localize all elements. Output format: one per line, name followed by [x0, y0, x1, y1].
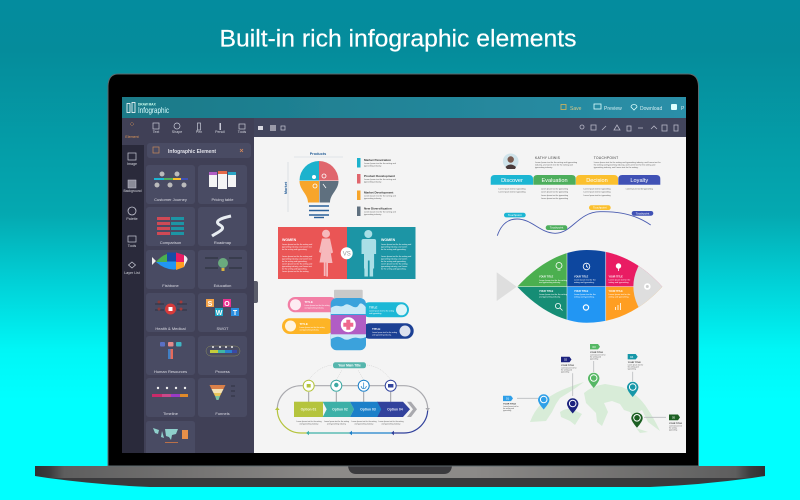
fish text: YOUR TITLE: [608, 290, 623, 293]
card: fishbone: [146, 250, 195, 289]
pill: cyan: and typesetting.: [369, 312, 382, 315]
app header bar: DRAW MAX: [138, 102, 157, 106]
fish text: writing and typesetting.: [574, 296, 595, 298]
women text: typesetting industry, and Lorem text: [282, 265, 312, 268]
pin 03: YOUR TITLE: [590, 352, 604, 354]
card: swot: T: [233, 310, 238, 317]
persona text: typesetting industry.: [535, 166, 553, 169]
pin 01: 01: [506, 397, 509, 401]
app header bar: Preview: [604, 106, 622, 112]
card: roadmap: [198, 207, 247, 246]
stage captions: Lorem Ipsum text for typesetting: [541, 188, 568, 190]
card: comparison: [146, 207, 195, 246]
panel header: Infographic Element: [168, 149, 216, 155]
card: fishbone: Fishbone: [162, 283, 179, 288]
pill: cyan: TITLE: [369, 306, 377, 310]
pill: blue: and typesetting industry.: [372, 333, 392, 336]
stage tabs: Decision: [586, 178, 608, 184]
men text: typesetting industry, and Lorem: [381, 246, 408, 248]
persona text: typesetting industry, and Lorem text for the writing.: [594, 166, 639, 169]
touchpoint tags: Touchpoint: [508, 213, 522, 217]
stage tabs: [491, 175, 660, 185]
card: customer journey: Customer Journey: [154, 197, 187, 202]
legend: typesetting industry.: [364, 180, 382, 184]
women text: for the writing and typesetting.: [282, 268, 308, 270]
legend: typesetting industry.: [364, 197, 382, 200]
pill: cyan: [362, 302, 409, 317]
stage captions: Lorem Ipsum text for typesetting: [541, 190, 568, 194]
women text: [282, 238, 312, 273]
pill: yellow: Lorem Ipsum text for the writing: [300, 326, 325, 329]
bottle: [331, 290, 366, 350]
app header bar: P: [681, 106, 685, 112]
pill: blue: TITLE: [372, 327, 380, 331]
persona text: Lorem Ipsum text for the writing and typesetting: [535, 161, 577, 164]
toolbar: Shape: [172, 130, 182, 134]
app header bar: Save: [570, 106, 582, 112]
fish text: and typesetting industry.: [539, 281, 561, 284]
stage captions: [498, 188, 653, 200]
pill: pink: and typesetting industry.: [304, 306, 324, 309]
pin 02: YOUR TITLE: [561, 365, 575, 367]
men text: Lorem Ipsum text for the writing: [381, 262, 407, 266]
stage captions: Lorem Ipsum text for typesetting: [541, 194, 568, 197]
step circles: [303, 380, 396, 391]
icon rail: Layer List: [124, 271, 140, 275]
pin 02: [561, 357, 578, 414]
fish text: writing and typesetting.: [608, 281, 629, 284]
toolbar: Element: [125, 135, 139, 139]
fish icons: [555, 262, 621, 310]
card: funnels: Funnels: [215, 411, 230, 416]
process flow infographic: [275, 362, 430, 435]
card: timeline: Timeline: [163, 411, 179, 416]
legend: Market Penetration: [364, 158, 391, 162]
fish text: YOUR TITLE: [539, 290, 554, 293]
pin 02: Lorem Ipsum text for: [561, 366, 577, 370]
persona text: TOUCHPOINT: [594, 156, 618, 160]
pill: yellow: [282, 318, 334, 334]
pin 02: typesetting: [561, 370, 569, 374]
card: swot: SWOT: [216, 326, 229, 331]
step connectors: [309, 392, 391, 402]
legend: [357, 158, 396, 216]
persona text: the writing and typesetting industry, and Lorem text for the writing and: [594, 163, 655, 166]
icon rail: Tools: [128, 244, 136, 248]
men text: WOMEN: [381, 238, 396, 242]
bulb infographic: [284, 152, 396, 218]
panel header: [147, 143, 251, 158]
map infographic: [503, 344, 683, 433]
men text: for the writing and typesetting.: [381, 248, 407, 251]
pill: cyan: Lorem Ipsum text for the writing: [369, 310, 394, 312]
fish infographic: [496, 250, 662, 323]
card: process: [198, 336, 247, 375]
card: swot: W: [216, 310, 223, 317]
persona text: Lorem Ipsum text for the writing and typesetting industry, and Lorem text for: [594, 161, 661, 164]
app header bar: Download: [640, 106, 662, 112]
legend: Market Development: [364, 190, 393, 194]
stage captions: Lorem Ipsum text for typesetting: [626, 188, 653, 190]
touchpoint tags: Touchpoint: [550, 226, 563, 230]
option arrow: Option 01: [301, 408, 316, 412]
men text: [381, 238, 411, 270]
fish text: Lorem Ipsum text for the writing: [539, 293, 567, 296]
fish text: Lorem Ipsum text for the: [608, 278, 631, 282]
pin 01: the writing and: [503, 407, 514, 410]
panel collapse handle: [254, 281, 258, 303]
men text: for the writing and typesetting.: [381, 268, 407, 270]
legend: Product Development: [364, 174, 395, 178]
women text: typesetting industry, and Lorem text: [282, 246, 312, 248]
main title pill: [333, 362, 366, 368]
women text: Lorem Ipsum text for the writing.: [282, 270, 309, 273]
toolbar: Pencil: [215, 130, 225, 134]
men text: typesetting industry, and Lorem: [381, 265, 408, 268]
card: world map: [146, 421, 195, 453]
sidebar panel: [144, 137, 254, 453]
icon rail: Image: [127, 162, 137, 166]
vs badge: VS: [343, 252, 351, 258]
option captions: and typesetting industry.: [354, 422, 374, 426]
man figure: [362, 230, 376, 276]
avatar: [503, 154, 518, 169]
touchpoint curve: [497, 212, 651, 236]
app header bar: Infographic: [138, 105, 170, 115]
pill: pink: Lorem Ipsum text for the writing: [304, 304, 330, 307]
card: swot: [198, 293, 247, 332]
fish text: Lorem Ipsum text for the: [574, 293, 597, 296]
pin 05: Lorem Ipsum text: [669, 424, 683, 428]
women text: typesetting industry, and Lorem text: [282, 258, 312, 260]
pin 04: the writing and: [628, 366, 639, 368]
icon rail: [122, 145, 144, 453]
app window: [122, 97, 686, 453]
men text: typesetting industry, and Lorem: [381, 258, 408, 260]
pin 05: the writing: [669, 426, 677, 430]
pin 05: 05: [672, 416, 675, 420]
customer journey infographic: [491, 154, 661, 236]
fish text: YOUR TITLE: [608, 276, 623, 278]
women text: for the writing and typesetting.: [282, 248, 308, 251]
card: comparison: Comparison: [160, 240, 181, 245]
stage captions: Lorem Ipsum text for typesetting: [498, 190, 526, 194]
world map: [530, 382, 660, 433]
pill: blue: [362, 323, 414, 339]
fish tail: [497, 272, 517, 301]
pin 05: YOUR TITLE: [669, 423, 683, 425]
option arrow: Option 03: [360, 408, 376, 412]
stage captions: Lorem Ipsum text for typesetting: [498, 188, 526, 190]
toolbar: ⁘: [129, 120, 135, 129]
pill: yellow: TITLE: [300, 322, 308, 326]
card: pricing table: [198, 165, 247, 204]
option arrow: Option 02: [332, 408, 348, 412]
pin 05: [631, 413, 683, 432]
toolbar: Pen: [196, 130, 202, 134]
fish text: Lorem Ipsum text for the: [608, 293, 631, 296]
pin 04: [627, 354, 644, 397]
pin 04: YOUR TITLE: [628, 362, 641, 364]
icon rail: Background: [123, 189, 142, 193]
legend: Lorem Ipsum text for the writing and: [364, 178, 396, 181]
fish text: YOUR TITLE: [574, 276, 589, 278]
main title pill: Your Main Title: [338, 364, 361, 368]
fish text: YOUR TITLE: [574, 290, 589, 293]
card: education: Education: [214, 283, 231, 288]
axis labels: Products: [310, 152, 326, 156]
card: human resources: Human Resources: [154, 369, 187, 374]
pin 01: Lorem Ipsum text for: [503, 405, 519, 408]
stage captions: Lorem Ipsum text for typesetting: [541, 197, 568, 200]
persona text: KATHY LEWIS: [535, 156, 561, 160]
toolbar: [122, 118, 686, 145]
card: swot: S: [208, 301, 213, 308]
persona text: industry, and Lorem text for the writing and: [535, 163, 573, 166]
men text: Lorem Ipsum text for the writing and: [381, 255, 411, 258]
axis labels: Market: [284, 181, 288, 194]
women text: Lorem Ipsum text for the writing and: [282, 255, 312, 258]
legend: Lorem Ipsum text for the writing and: [364, 162, 396, 165]
card: human resources: [146, 336, 195, 375]
touchpoint tags: Touchpoint: [636, 211, 649, 215]
app header bar: [122, 97, 686, 118]
option captions: Lorem Ipsum text for the writing: [324, 420, 349, 423]
card: process: Process: [215, 369, 230, 374]
option captions: and typesetting industry.: [327, 422, 347, 426]
touchpoint tags: [504, 205, 653, 230]
card: health and medical: Health & Medical: [155, 326, 186, 331]
pin 03: Lorem Ipsum text for: [590, 354, 606, 356]
fish text: Lorem Ipsum text for the: [574, 278, 597, 282]
women text: Lorem Ipsum text for the writing and: [282, 243, 312, 246]
toolbar: Text: [153, 130, 159, 134]
canvas: [254, 137, 686, 453]
option captions: Lorem Ipsum text for the writing: [296, 420, 322, 423]
pin 03: typesetting: [590, 358, 598, 360]
card: customer journey: [146, 165, 195, 204]
fish text: [539, 276, 631, 298]
touchpoint tags: Touchpoint: [593, 206, 607, 210]
pin 05: typesetting: [669, 428, 677, 432]
legend: Lorem Ipsum text for the writing and: [364, 210, 396, 214]
pin 01: [503, 394, 549, 412]
pill: pink: [288, 297, 338, 312]
pin 01: typesetting: [503, 409, 511, 412]
pin 02: the writing and: [561, 368, 572, 372]
card: funnels: [198, 378, 247, 417]
fish eye: [644, 283, 651, 290]
option captions: Lorem Ipsum text for the writing: [351, 420, 377, 423]
connector lines: [517, 361, 666, 417]
option captions: and typesetting industry.: [381, 422, 401, 426]
legend: typesetting industry.: [364, 164, 382, 168]
card: education: [198, 250, 247, 289]
laptop base: [35, 466, 765, 487]
pin 03: [588, 344, 606, 388]
option captions: [296, 420, 404, 426]
option arrow: [294, 402, 417, 417]
toolbar: Tools: [238, 130, 246, 134]
women text: WOMEN: [282, 238, 297, 242]
option captions: Lorem Ipsum text for the writing: [378, 420, 404, 423]
axis labels: [284, 152, 343, 212]
pill: pink: TITLE: [304, 300, 313, 304]
card: health and medical: [146, 293, 195, 332]
icon rail: Palette: [126, 217, 138, 221]
men text: Lorem Ipsum text for the writing and: [381, 243, 411, 246]
pill: yellow: and typesetting industry.: [300, 328, 319, 331]
stage tabs: Discover: [501, 178, 523, 184]
stage captions: Lorem Ipsum text for typesetting: [583, 188, 611, 190]
fish text: YOUR TITLE: [539, 276, 554, 278]
pin 04: typesetting: [628, 368, 636, 370]
option captions: and typesetting industry.: [299, 422, 319, 426]
women text: for the writing and typesetting.: [282, 260, 308, 263]
medicine bottle infographic: [282, 290, 414, 350]
laptop screen bezel: [108, 74, 698, 466]
card: timeline: [146, 378, 195, 417]
pill: blue: Lorem Ipsum text for the writing: [372, 331, 397, 334]
pin 04: Lorem Ipsum text for: [628, 364, 644, 366]
pin 02: 02: [564, 358, 567, 362]
stage tabs: Loyalty: [630, 178, 648, 184]
legend: Lorem Ipsum text for the writing and: [364, 194, 396, 198]
card: roadmap: Roadmap: [214, 240, 232, 245]
stage tabs: Evaluation: [541, 178, 568, 184]
pin 03: 03: [592, 345, 596, 349]
pin 04: 04: [630, 355, 634, 359]
option arrow: Option 04: [387, 408, 403, 412]
legend: New Diversification: [364, 206, 392, 210]
persona text: [535, 156, 661, 169]
fish text: writing and typesetting.: [608, 296, 629, 298]
fish text: and typesetting industry.: [539, 296, 561, 298]
stage captions: Lorem Ipsum text for typesetting: [583, 190, 611, 194]
card: pricing table: Pricing table: [211, 197, 234, 202]
fish text: Lorem Ipsum text for the writing: [539, 279, 567, 282]
women text: Lorem Ipsum text for the writing and: [282, 262, 312, 266]
pin 01: YOUR TITLE: [503, 404, 517, 406]
woman figure: [319, 230, 333, 276]
track oval: [275, 386, 430, 435]
women versus men panel: [278, 227, 416, 279]
card: swot: O: [224, 301, 230, 308]
legend: typesetting industry.: [364, 213, 382, 216]
stage captions: Lorem Ipsum text for typesetting: [583, 194, 611, 197]
fish body: [517, 250, 662, 323]
title: Built-in rich infographic elements: [220, 26, 576, 52]
bulb: [300, 161, 338, 218]
men text: for the writing and typesetting.: [381, 260, 407, 263]
fish text: writing and typesetting.: [574, 281, 595, 284]
pin 03: the writing and: [590, 356, 601, 358]
dashed connectors: [309, 365, 391, 380]
